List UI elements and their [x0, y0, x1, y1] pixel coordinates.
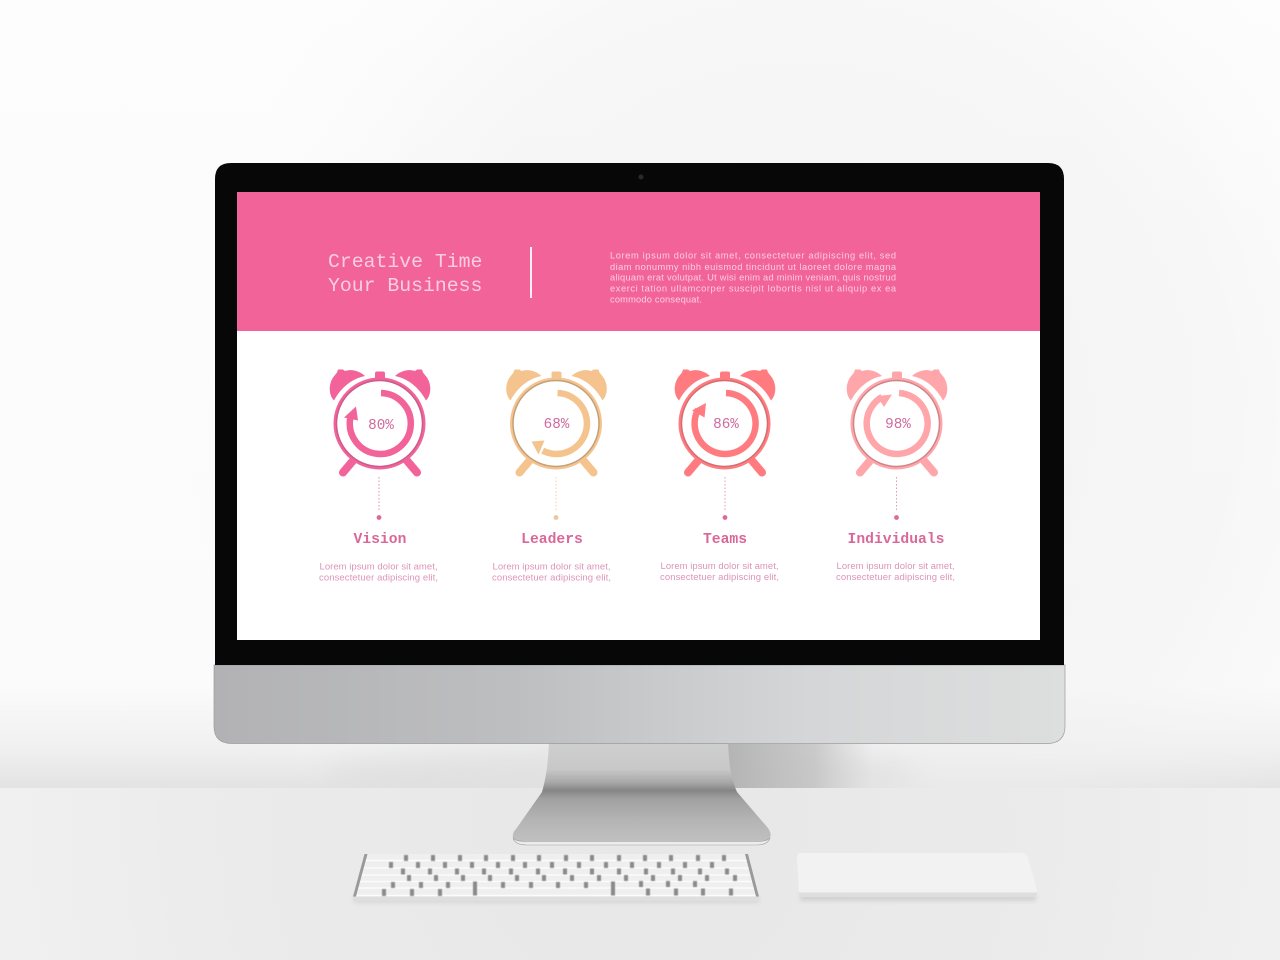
- icon: alarm clock 80%: 80%: [368, 418, 394, 434]
- trackpad: [797, 853, 1037, 901]
- icon: alarm clock 98%: 98%: [885, 417, 911, 433]
- caption: consectetuer adipiscing elit,: [319, 572, 438, 584]
- caption: [319, 562, 438, 584]
- heading: Individuals: Individuals: [848, 532, 944, 548]
- connector: [554, 477, 558, 520]
- connector: [894, 477, 899, 520]
- intro paragraph: aliquam erat volutpat. Ut wisi enim ad minim veniam, quis nostrud: [610, 272, 896, 282]
- connector: [377, 477, 381, 520]
- monitor stand: [513, 742, 771, 845]
- keyboard: [353, 854, 759, 903]
- title: Creative Time: [328, 251, 482, 273]
- wall background: [0, 744, 1280, 788]
- caption: [492, 562, 611, 584]
- header band: [237, 192, 1040, 331]
- intro paragraph: commodo consequat.: [610, 294, 702, 304]
- webcam: [638, 174, 644, 180]
- caption: consectetuer adipiscing elit,: [492, 572, 611, 584]
- icon: alarm clock 86%: [675, 370, 775, 472]
- caption: Lorem ipsum dolor sit amet,: [836, 561, 954, 572]
- caption: Lorem ipsum dolor sit amet,: [320, 562, 438, 572]
- heading: Vision: Vision: [354, 532, 406, 548]
- column: Leaders: [492, 370, 611, 584]
- screen: slide: [237, 192, 1040, 640]
- caption: consectetuer adipiscing elit,: [660, 572, 779, 583]
- desk surface: [0, 788, 1280, 960]
- column: Vision: [319, 370, 438, 584]
- icon: alarm clock 86%: 86%: [713, 417, 739, 433]
- divider: [530, 247, 532, 298]
- icon: alarm clock 98%: [847, 370, 947, 472]
- icon: alarm clock 80%: [330, 370, 430, 472]
- icon: alarm clock 68%: [506, 370, 607, 472]
- intro paragraph: [610, 250, 897, 304]
- connector: [723, 477, 727, 520]
- caption: Lorem ipsum dolor sit amet,: [660, 561, 778, 572]
- caption: [660, 561, 779, 583]
- monitor chin: [214, 665, 1065, 744]
- heading: Teams: Teams: [703, 532, 747, 548]
- title: Your Business: [328, 275, 482, 297]
- caption: [836, 561, 955, 583]
- monitor bezel: [215, 163, 1064, 665]
- caption: consectetuer adipiscing elit,: [836, 572, 955, 583]
- column: Teams: [660, 370, 779, 583]
- heading: Leaders: Leaders: [521, 532, 583, 548]
- title: [328, 251, 482, 297]
- intro paragraph: Lorem ipsum dolor sit amet, consectetuer adipiscing elit, sed: [610, 250, 896, 260]
- column: Individuals: [836, 370, 955, 583]
- icon: alarm clock 68%: 68%: [544, 417, 570, 433]
- caption: Lorem ipsum dolor sit amet,: [492, 562, 610, 572]
- intro paragraph: exerci tation ullamcorper suscipit lobortis nisl ut aliquip ex ea: [610, 284, 897, 294]
- intro paragraph: diam nonummy nibh euismod tincidunt ut laoreet dolore magna: [610, 262, 897, 272]
